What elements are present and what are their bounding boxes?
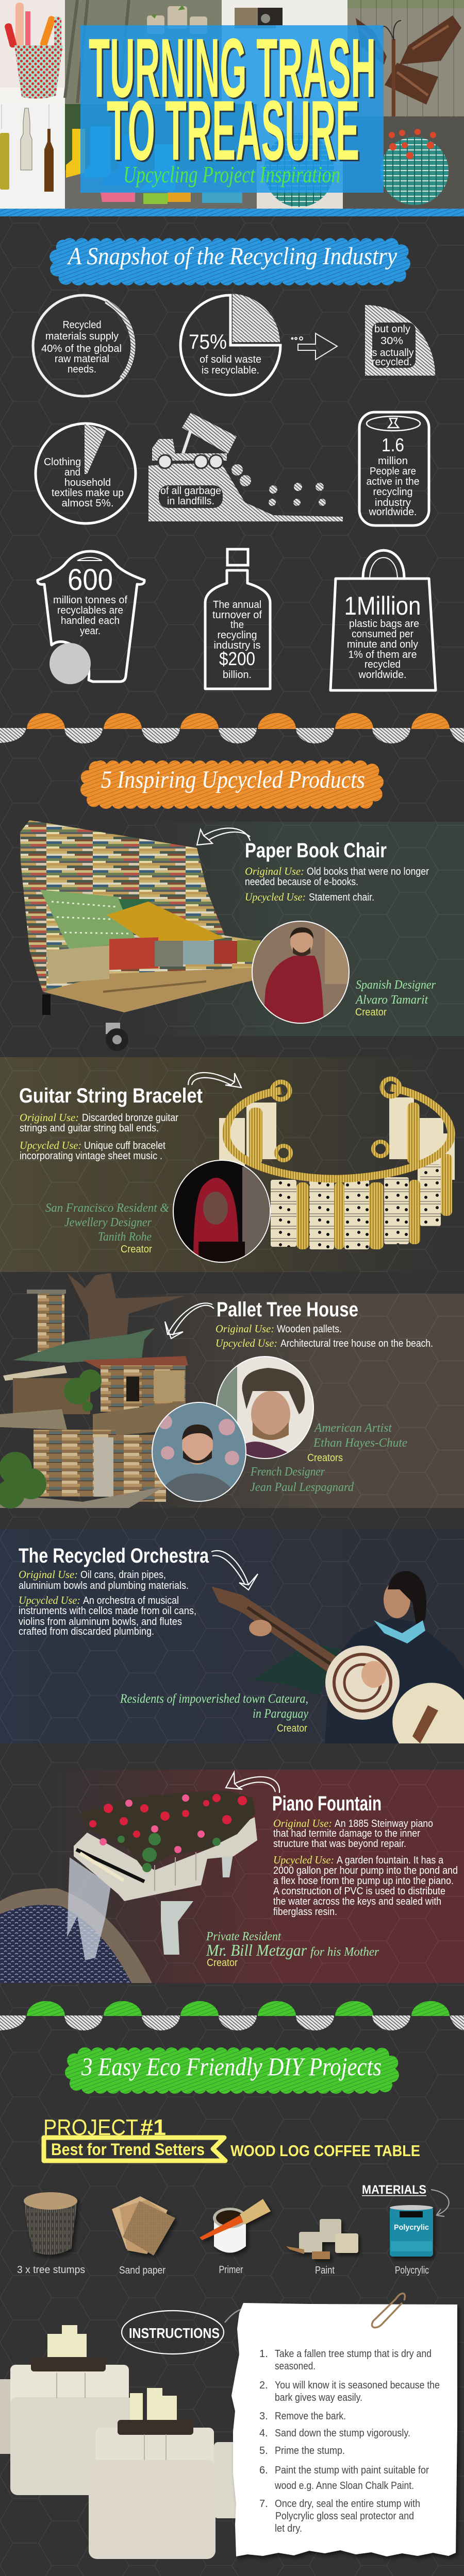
creator credit: Alvaro Tamarit [355, 993, 428, 1007]
title: Pallet Tree House [217, 1298, 358, 1321]
description: crafted from discarded plumbing. [19, 1626, 154, 1637]
stat: 75% pie: of solid waste [200, 354, 261, 365]
label: 3 x tree stumps [17, 2264, 85, 2276]
stat: 40% circle: materials supply [45, 331, 119, 342]
description: Old books that were no longer [307, 866, 429, 877]
instructions note: Polycrylic gloss seal protector and [275, 2511, 414, 2522]
instructions note: wood e.g. Anne Sloan Chalk Paint. [274, 2480, 414, 2492]
stat: bucket 600 million [38, 551, 144, 684]
description: Original Use: [20, 1111, 79, 1124]
arrow [225, 2308, 267, 2339]
description [216, 1323, 433, 1349]
instructions note: Paint the stump with paint suitable for [275, 2465, 429, 2476]
portrait: designer [252, 921, 351, 1025]
instructions note: 2. [259, 2380, 268, 2391]
description: fiberglass resin. [273, 1906, 337, 1918]
creator credit [355, 978, 436, 1018]
stat: bag 1 million: recycled [364, 659, 401, 670]
stat: 5% textile pie: Clothing [44, 456, 81, 468]
creator credit: Creator [355, 1007, 387, 1018]
divider: orange and white scallops [0, 713, 464, 743]
creator credit: Spanish Designer [356, 978, 436, 992]
stat: bottle $200 billion: recycling [218, 630, 257, 641]
title: The Recycled Orchestra [19, 1545, 209, 1567]
blue chalk band [0, 209, 464, 216]
creator credit [120, 1692, 309, 1734]
description: Upcycled Use: [245, 891, 306, 903]
stat: 5% textile pie [36, 423, 136, 523]
creator credit [206, 1930, 379, 1969]
creator credit: Tanith Rohe [98, 1230, 152, 1244]
photo: toilet roll seedlings [65, 0, 222, 104]
project label: #1 [140, 2115, 166, 2140]
materials heading: MATERIALS [362, 2183, 426, 2197]
instructions note: let dry. [275, 2523, 302, 2534]
arrow [197, 828, 250, 845]
label: Polycrylic [395, 2265, 429, 2276]
photo: bottle lights [0, 104, 65, 209]
arrow [165, 1303, 214, 1338]
photo: guitar string bracelet [219, 1079, 455, 1249]
panel: recycled orchestra [19, 1545, 464, 1743]
instructions note [231, 2293, 457, 2556]
description: Statement chair. [309, 892, 374, 903]
portrait: French designer [152, 1401, 246, 1504]
photo: white stump table [0, 2325, 248, 2559]
photo: cactus basket on light [257, 116, 343, 209]
panel: paper book chair [20, 820, 436, 1051]
creator credit: San Francisco Resident & [45, 1201, 169, 1215]
instructions note: 3. [259, 2411, 268, 2422]
banner: Best for Trend Setters [51, 2140, 205, 2159]
description: aluminium bowls and plumbing materials. [19, 1580, 189, 1591]
creator credit: Residents of impoverished town Cateura, [120, 1692, 308, 1706]
stat: bag 1 million: plastic bags are [349, 618, 419, 630]
arrow [188, 1073, 241, 1088]
photo: rain boot planters [65, 104, 257, 209]
heading: DIY projects: 3 Easy Eco Friendly DIY Projects [81, 2052, 382, 2081]
photo: pallet tree house [0, 1273, 188, 1509]
stat: bag 1 million: 1% of them are [349, 649, 417, 660]
description [20, 1111, 178, 1162]
instructions note: seasoned. [275, 2361, 316, 2372]
panel: guitar string bracelet [19, 1073, 455, 1263]
header photo collage [0, 0, 464, 209]
description: instruments with cellos made from oil cans, [19, 1605, 196, 1617]
creator credit: Ethan Hayes-Chute [313, 1436, 407, 1450]
instructions note: 4. [259, 2428, 268, 2439]
stat: 5% textile pie: household [64, 477, 111, 488]
instructions note: Sand down the stump vigorously. [275, 2428, 410, 2439]
stat: bottle $200 billion: turnover of [212, 609, 262, 621]
photo: piano fountain [0, 1790, 257, 1983]
description: Unique cuff bracelet [84, 1140, 165, 1151]
project name: WOOD LOG COFFEE TABLE [230, 2142, 420, 2160]
material: tree stump [24, 2192, 77, 2255]
photo: polka dot cup [0, 0, 65, 104]
description: Upcycled Use: [273, 1854, 334, 1866]
title: Guitar String Bracelet [19, 1084, 203, 1107]
instructions note: Take a fallen tree stump that is dry and [275, 2348, 432, 2360]
instructions note: 1. [259, 2348, 268, 2360]
description: An orchestra of musical [83, 1595, 179, 1606]
stat: 40% circle: Recycled [63, 319, 101, 331]
description: violins from aluminum bowls, and flutes [19, 1616, 182, 1628]
creator credit: Creator [277, 1723, 307, 1734]
stat: 40% circle: 40% of the global [41, 343, 122, 354]
stat: bag 1 million: worldwide. [358, 669, 406, 681]
project label: PROJECT [43, 2115, 138, 2140]
material: polycrylic can [390, 2205, 433, 2257]
stat: can 1.6 million: 1.6 [382, 434, 404, 455]
stat: can 1.6 million [359, 412, 429, 526]
description: Original Use: [19, 1568, 78, 1581]
stat: 30% quarter [365, 305, 435, 376]
description: Discarded bronze guitar [82, 1112, 178, 1124]
arrow: 75% to 30% [292, 333, 337, 360]
instructions note: Prime the stump. [275, 2445, 345, 2456]
photo: upcycled shelf [222, 0, 347, 116]
description: Architectural tree house on the beach. [280, 1338, 433, 1349]
stat: 5% textile pie: almost 5%. [62, 498, 113, 509]
description: Wooden pallets. [277, 1324, 342, 1335]
stat: landfill truck: in landfills. [167, 496, 214, 507]
description: Original Use: [273, 1817, 332, 1829]
stat: can 1.6 million: industry [375, 497, 411, 509]
creator credit: French Designer [250, 1465, 325, 1479]
stat: bottle $200 billion: The annual [213, 599, 261, 611]
instructions note: Remove the bark. [275, 2411, 346, 2422]
photo: book chair [20, 820, 260, 1051]
stat: bottle $200 billion: $200 [219, 648, 255, 669]
divider: green and white scallops [0, 2001, 464, 2030]
stat: landfill truck [148, 413, 343, 521]
material: sand paper [112, 2196, 175, 2256]
description [273, 1817, 458, 1918]
stat: landfill truck: of all garbage [160, 485, 221, 497]
stat: bottle $200 billion [205, 549, 270, 689]
materials heading [362, 2183, 449, 2216]
creator credit: Jean Paul Lespagnard [250, 1481, 354, 1494]
creator credit: for his Mother [310, 1945, 379, 1959]
stat: 75% pie: 75% [189, 331, 227, 353]
stat: 40% circle [33, 295, 134, 396]
heading: snapshot [57, 243, 403, 278]
stat: can 1.6 million: People are [370, 466, 416, 477]
stat: bottle $200 billion: industry is [213, 640, 261, 651]
description: A garden fountain. It has a [337, 1855, 444, 1866]
instructions badge [122, 2311, 224, 2354]
label: Sand paper [119, 2265, 165, 2276]
creator credit: Mr. Bill Metzgar [206, 1941, 307, 1959]
stat: can 1.6 million: recycling [373, 486, 412, 498]
portrait: American artist [216, 1356, 314, 1461]
creator credit: Creator [207, 1957, 238, 1969]
stat: bucket 600 million: million tonnes of [53, 595, 127, 606]
stat: 40% circle: raw material [55, 353, 109, 365]
title [89, 21, 377, 179]
description: Oil cans, drain pipes, [80, 1569, 166, 1581]
stat: bottle $200 billion: the [230, 619, 244, 631]
stat: 5% textile pie: and [64, 467, 80, 478]
description: Original Use: [216, 1323, 274, 1335]
title: Piano Fountain [272, 1792, 382, 1815]
stat: can 1.6 million: worldwide. [369, 506, 417, 518]
title: Paper Book Chair [245, 839, 387, 862]
subtitle: Upcycling Project Inspiration [123, 161, 340, 188]
instructions note: 7. [259, 2498, 268, 2510]
instructions note: 6. [259, 2465, 268, 2476]
creator credit: in Paraguay [253, 1707, 309, 1721]
description: the water across the keys and sealed with [273, 1896, 441, 1907]
title panel [80, 21, 384, 193]
description [245, 865, 429, 903]
description: incorporating vintage sheet music . [20, 1150, 162, 1162]
stat: can 1.6 million: million [378, 455, 408, 467]
instructions badge: INSTRUCTIONS [129, 2325, 220, 2341]
photo: wooden butterfly on fence [347, 0, 464, 116]
stat: 40% circle: needs. [68, 364, 96, 375]
description: that had termite damage to the inner [273, 1828, 420, 1839]
description [19, 1568, 196, 1637]
creator credit: Creator [121, 1244, 152, 1255]
arrow [211, 1551, 258, 1590]
heading: inspiring products: 5 Inspiring Upcycled Products [101, 766, 365, 793]
arrow [226, 1772, 279, 1793]
instructions note: bark gives way easily. [275, 2392, 362, 2403]
panel: pallet tree house [0, 1273, 433, 1509]
description: Upcycled Use: [216, 1337, 277, 1349]
instructions note: 5. [259, 2445, 268, 2456]
description: Upcycled Use: [19, 1594, 80, 1606]
heading: snapshot: A Snapshot of the Recycling Industry [67, 243, 397, 270]
portrait: jewellery designer [173, 1159, 273, 1263]
instructions note: You will know it is seasoned because the [275, 2380, 440, 2391]
stat: 75% pie: is recyclable. [202, 365, 259, 376]
stat: 5% textile pie: textiles make up [52, 487, 124, 499]
creator credit [250, 1421, 407, 1494]
panel: piano fountain [0, 1772, 458, 1983]
material: primer with brush [200, 2199, 271, 2252]
description: strings and guitar string ball ends. [20, 1123, 159, 1134]
creator credit: Creators [307, 1452, 343, 1464]
section: recycling statistics [33, 294, 436, 690]
stat: bucket 600 million: handled each [61, 615, 120, 626]
stat: bag 1 million [330, 550, 436, 690]
creator credit: Jewellery Designer [64, 1216, 152, 1229]
paper clip [372, 2293, 405, 2328]
material: polycrylic can: Polycrylic [394, 2223, 429, 2232]
photo: cactus basket on dark [343, 116, 464, 209]
description: Upcycled Use: [20, 1139, 81, 1151]
description: A construction of PVC is used to distribute [273, 1886, 445, 1897]
stat: bucket 600 million: year. [80, 625, 101, 637]
creator credit: American Artist [313, 1421, 392, 1435]
photo: girl with recycled guitar [211, 1571, 464, 1743]
stat: bucket 600 million: 600 [68, 563, 113, 597]
section: project 1 [0, 2115, 457, 2559]
description: An 1885 Steinway piano [335, 1818, 433, 1829]
heading: inspiring products [88, 766, 376, 802]
stat: bag 1 million: consumed per [352, 629, 413, 640]
stat: 75% pie [180, 294, 280, 395]
stat: bucket 600 million: recyclables are [57, 605, 123, 616]
stat: can 1.6 million: active in the [366, 476, 420, 487]
stat: bottle $200 billion: billion. [223, 669, 252, 681]
label: Paint [315, 2265, 335, 2276]
stat: 30% quarter: 30% [380, 335, 403, 347]
label: Primer [219, 2264, 243, 2276]
description: Original Use: [245, 865, 304, 877]
material: paint and brushes [286, 2219, 358, 2259]
stat: 30% quarter: recycled. [372, 357, 412, 368]
stat: 30% quarter: is actually [370, 347, 413, 359]
stat: bag 1 million: 1Million [344, 591, 421, 620]
instructions note: Once dry, seal the entire stump with [275, 2498, 420, 2510]
description: needed because of e-books. [245, 876, 358, 888]
creator credit: Private Resident [206, 1930, 281, 1943]
description: structure that was beyond repair. [273, 1838, 406, 1850]
stat: 30% quarter: but only [374, 324, 410, 335]
creator credit [45, 1201, 169, 1255]
stat: bag 1 million: minute and only [347, 639, 418, 650]
